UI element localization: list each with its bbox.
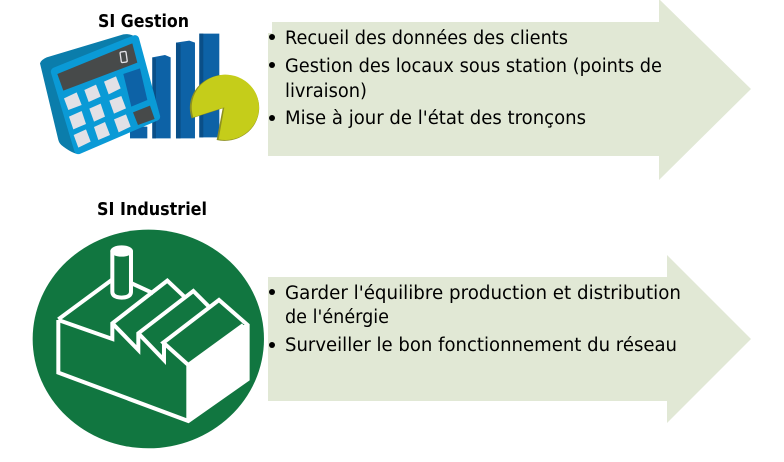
- heading: SI Gestion: SI Gestion: [98, 12, 189, 32]
- text block: SI Industriel list: Surveiller le bon fonctionnement du réseau: [285, 335, 677, 356]
- arrow: SI Gestion: [268, 0, 751, 180]
- text block: SI Gestion list: Recueil des données des clients: [285, 28, 568, 49]
- arrow: SI Industriel: [268, 255, 751, 423]
- icon: calculator and charts: [40, 34, 259, 154]
- text block: SI Gestion list: [269, 28, 662, 129]
- text block: SI Gestion list: Gestion des locaux sous station (points de: [285, 56, 662, 77]
- text block: SI Industriel list: Garder l'équilibre production et distribution: [285, 283, 681, 304]
- bar chart: [130, 34, 219, 138]
- calculator: [40, 34, 157, 154]
- text block: SI Gestion list: livraison): [285, 81, 367, 102]
- panel: SI Industriel: [33, 200, 751, 448]
- text block: SI Industriel list: [269, 283, 681, 356]
- pie chart: [190, 75, 259, 141]
- heading: SI Industriel: SI Industriel: [97, 200, 207, 220]
- text block: SI Industriel list: de l'énérgie: [285, 307, 389, 328]
- panel: SI Gestion: [40, 0, 751, 180]
- icon: factory: [33, 230, 264, 448]
- text block: SI Gestion list: Mise à jour de l'état des tronçons: [285, 108, 586, 129]
